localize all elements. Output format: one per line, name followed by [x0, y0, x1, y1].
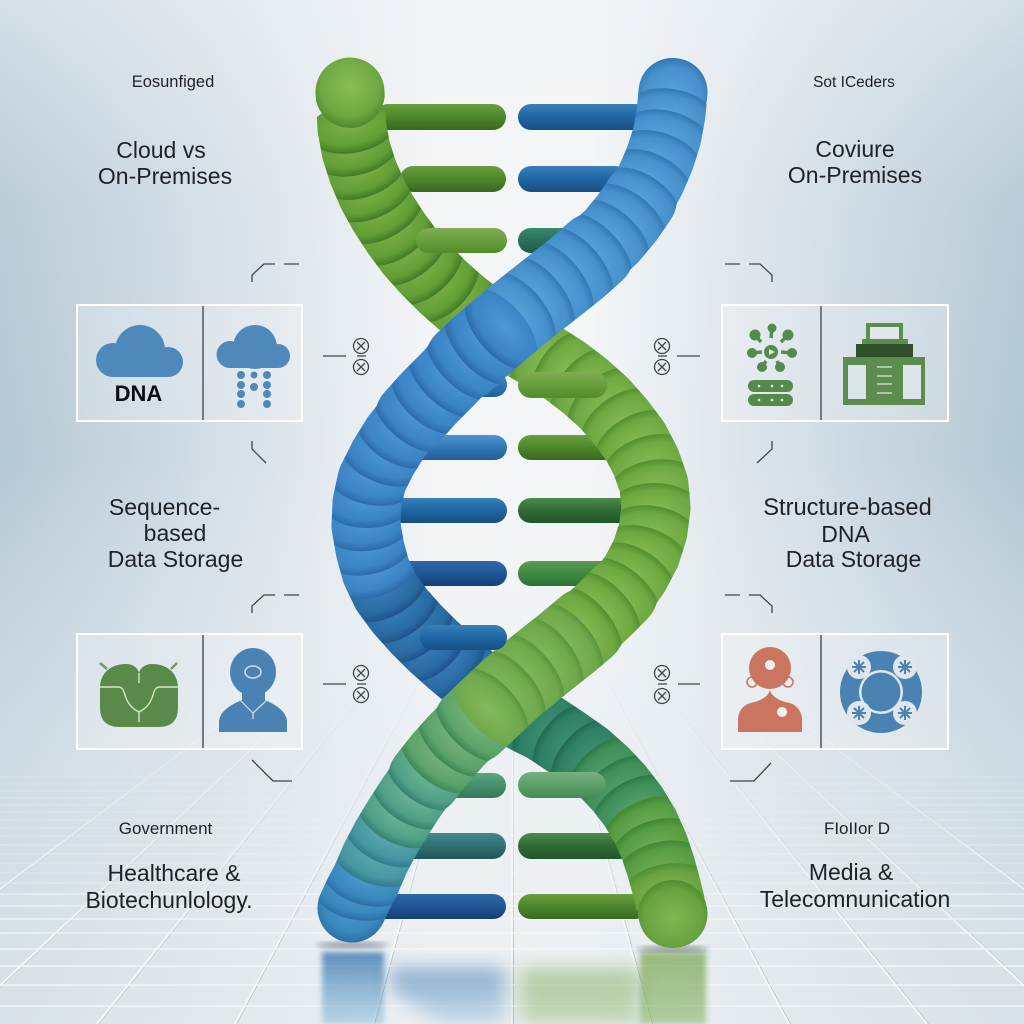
mid-right labels — [763, 495, 932, 572]
mid-left labels: Sequence- — [109, 494, 220, 520]
connector marks: upper right — [654, 264, 772, 463]
bottom-right labels: Media & — [809, 859, 893, 885]
icon: green split shape — [100, 663, 178, 727]
top-right labels: Sot ICeders — [813, 74, 895, 91]
top-right labels: On-Premises — [788, 162, 922, 188]
top-left labels: Eosunfiged — [132, 73, 214, 91]
icon: rain cloud — [216, 325, 290, 408]
bottom-right labels — [760, 819, 950, 912]
green strand, middle back section — [507, 328, 690, 502]
reflections on floor — [316, 942, 709, 1024]
blue strand, middle section — [332, 290, 538, 700]
connector marks: upper left — [252, 264, 368, 463]
icon: cloud with DNA label — [96, 325, 183, 406]
top-right labels: Coviure — [815, 136, 895, 162]
mid-left labels — [108, 494, 243, 572]
green strand, upper back section — [316, 58, 516, 381]
blue strand, lower section — [506, 698, 708, 948]
bottom-left labels: Biotechunlology. — [85, 887, 253, 913]
connector marks: lower left — [252, 595, 368, 781]
mid-right labels: Data Storage — [786, 546, 921, 572]
top-left labels: On-Premises — [98, 163, 232, 189]
top-right labels — [788, 74, 922, 188]
top-left labels: Cloud vs — [116, 137, 206, 163]
panel: cloud DNA and rain cloud — [77, 305, 302, 421]
icon: building — [843, 323, 925, 405]
panel: person and ring — [722, 634, 948, 749]
DNA rungs behind strands — [370, 104, 648, 919]
icon: molecule over server — [747, 324, 797, 406]
blue strand, upper section — [484, 58, 708, 353]
mid-left labels: based — [144, 520, 206, 546]
mid-left labels: Data Storage — [108, 546, 243, 572]
floor grid — [0, 700, 1024, 1024]
mid-right labels: Structure-based — [763, 495, 932, 521]
icon: red person — [738, 647, 802, 732]
green strand, middle front section — [454, 483, 690, 746]
panel: leaf shape and person — [77, 634, 302, 749]
panel: molecule server and building — [722, 305, 948, 421]
green-to-blue strand, lower front section — [318, 686, 508, 942]
bottom-right labels: FIoIIor D — [824, 819, 890, 838]
bottom-left labels: Government — [119, 819, 213, 838]
top-left labels — [98, 73, 232, 189]
bottom-left labels — [85, 819, 253, 913]
icon: blue ring with snowflakes — [840, 651, 922, 733]
mid-right labels: DNA — [821, 521, 870, 547]
bottom-left labels: Healthcare & — [108, 860, 240, 886]
icon: blue person — [219, 648, 287, 732]
connector marks: lower right — [654, 595, 772, 781]
icon: cloud with DNA label: DNA — [115, 381, 162, 406]
DNA rungs in front of strands — [416, 228, 607, 798]
bottom-right labels: Telecomnunication — [760, 886, 950, 912]
